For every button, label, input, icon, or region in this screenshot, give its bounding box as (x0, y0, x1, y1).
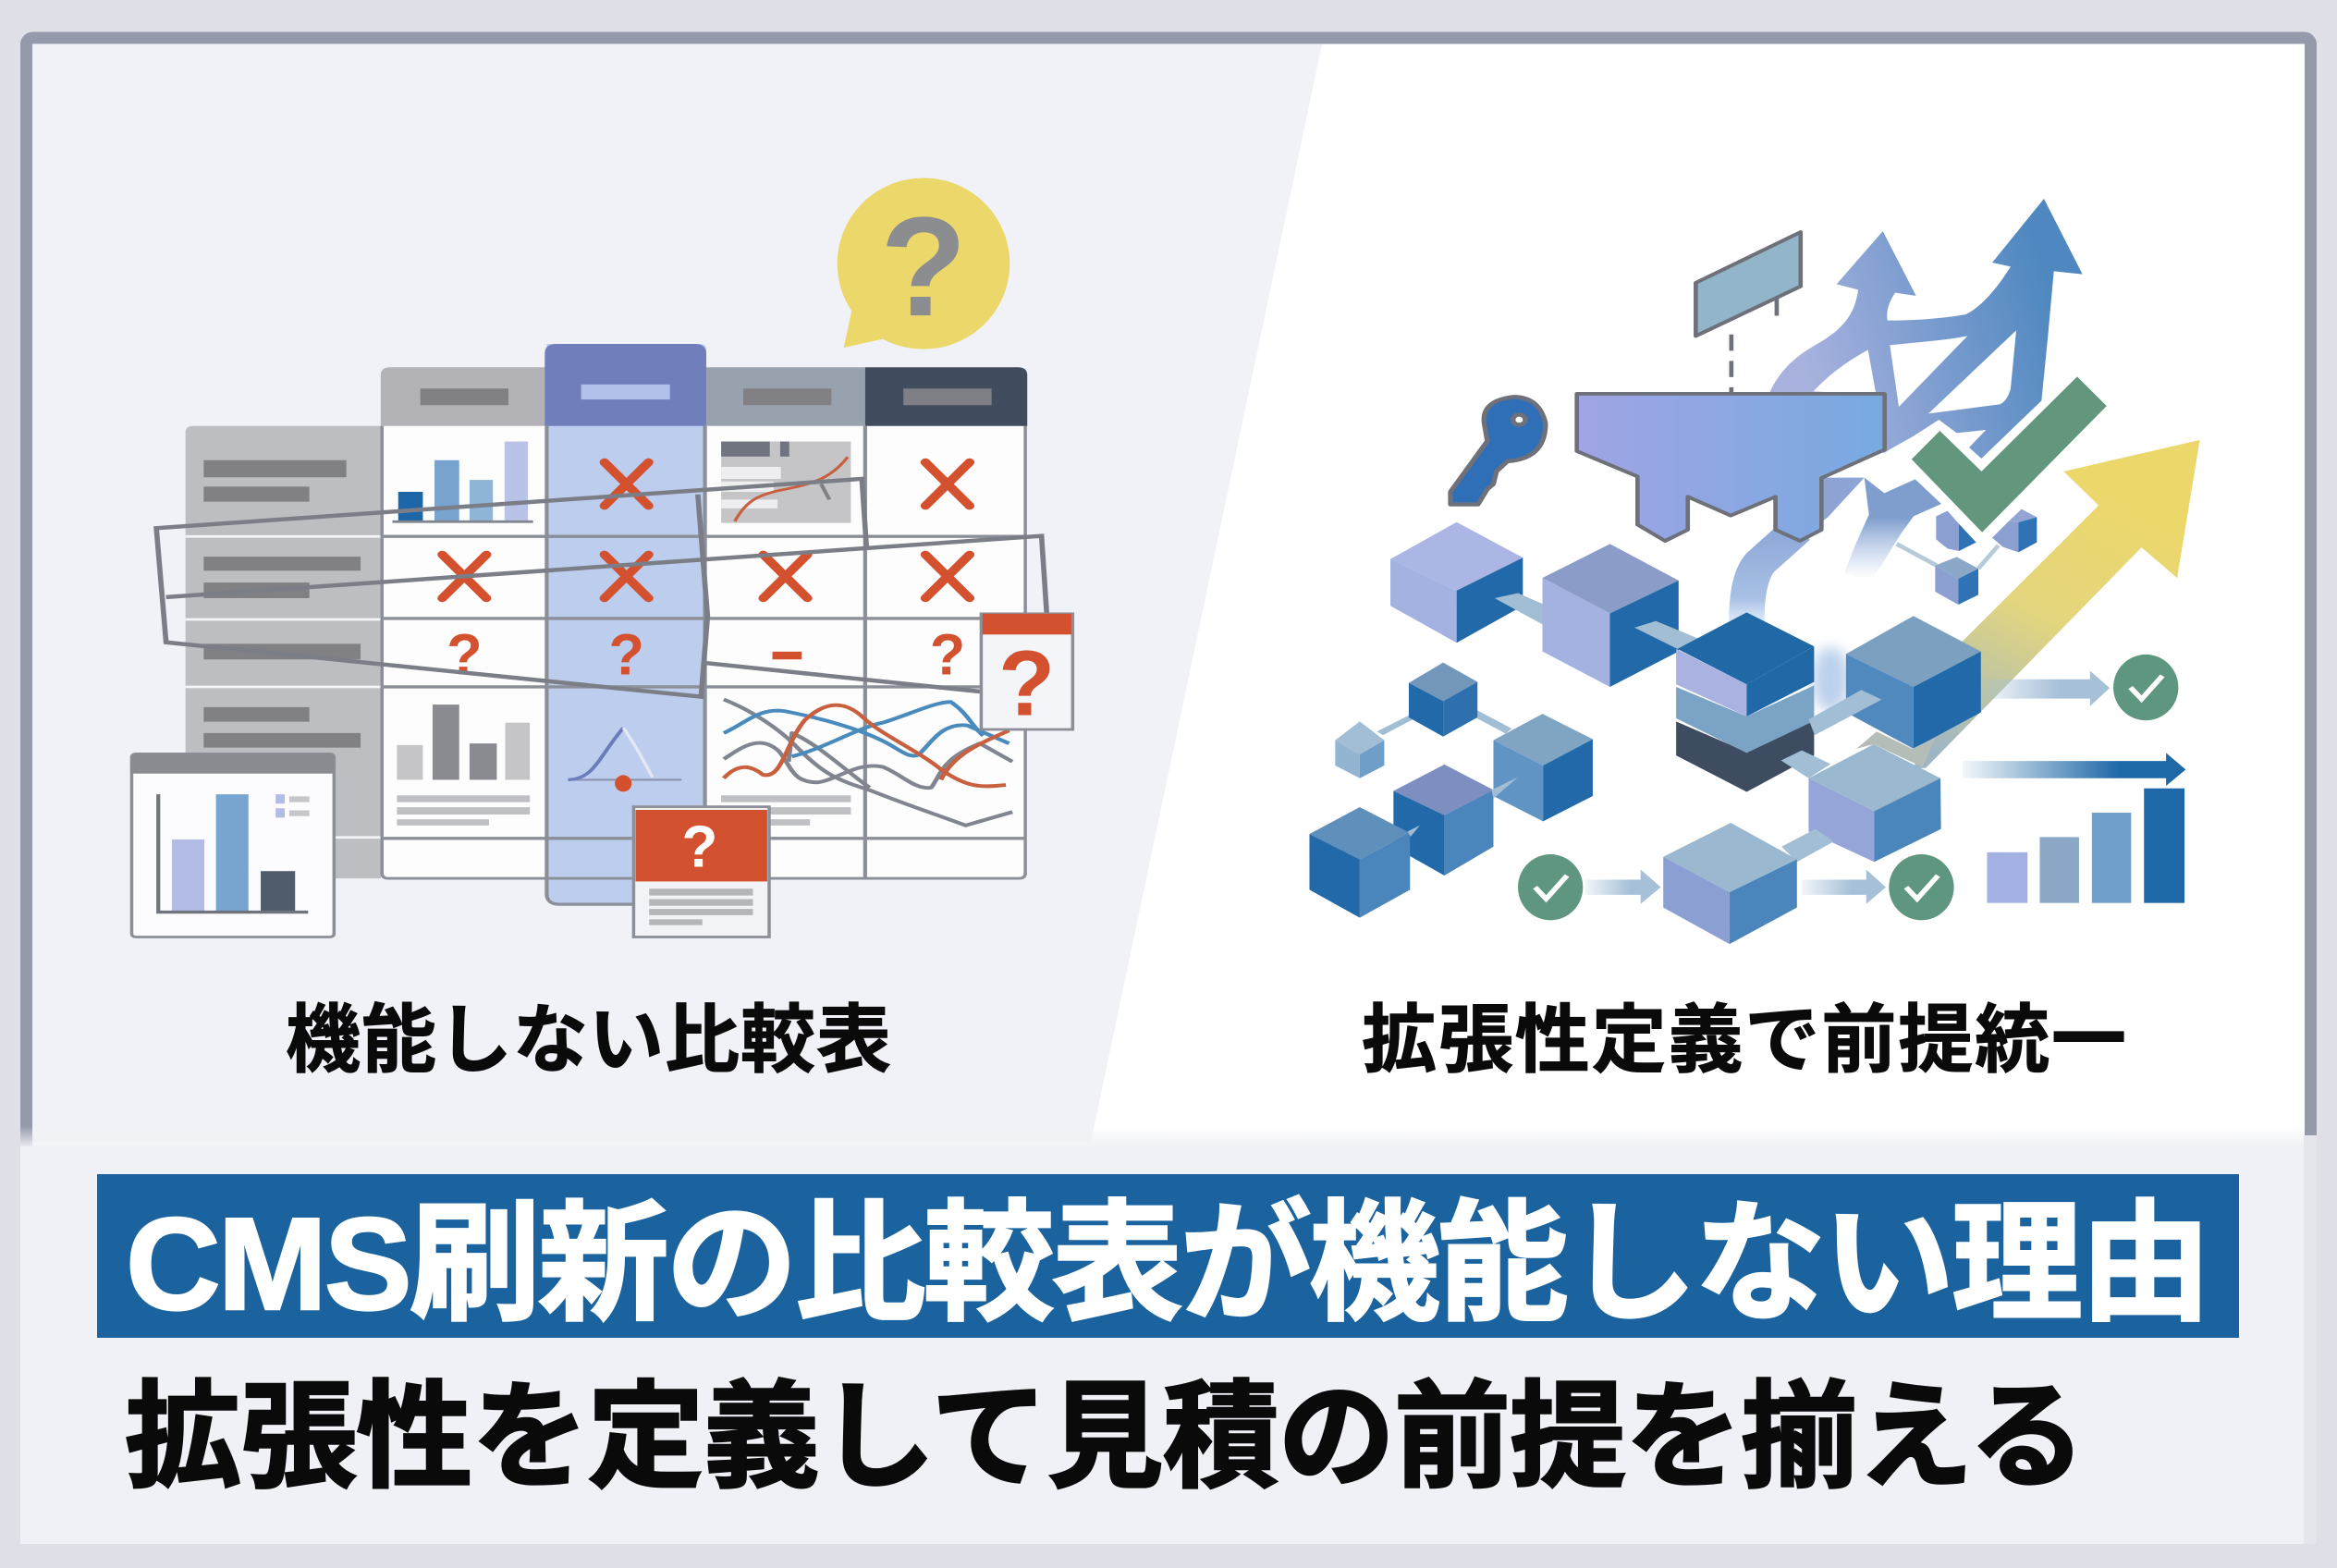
link: pale cube to second cube (1495, 594, 1544, 625)
arrow: cube to top badge (1984, 670, 2110, 706)
caption: left: 機能しない比較表 (286, 999, 891, 1083)
bar chart: row 1 (392, 442, 533, 523)
subtitle: 拡張性を定義して見積の前提を揃える (125, 1372, 2086, 1502)
marks: red question marks (447, 623, 965, 688)
overlapping misaligned outlines (156, 479, 1046, 697)
arrow tail shade behind lower cube (1856, 731, 1935, 767)
icon: report question card (633, 807, 769, 937)
link: lower right cube to bottom cube (1781, 829, 1834, 862)
funnel (1577, 394, 1885, 541)
icon: calendar question card: ? (998, 631, 1055, 735)
icon: key (1450, 397, 1546, 505)
stacked central blocks (1676, 612, 1814, 792)
arrow: cube to badge (1802, 869, 1886, 904)
caption: right: 拡張性定義で前提統一 (1362, 999, 2126, 1083)
icon: check badge left (1518, 854, 1583, 920)
chart window: bottom left (131, 753, 334, 937)
pale stem below funnel (1746, 530, 1797, 621)
arrow: blue right (1963, 753, 2185, 786)
cube: second (1543, 544, 1679, 687)
illustration: scalable architecture (1309, 199, 2200, 944)
icon: check badge right (2113, 655, 2178, 720)
bar chart: row 4 (397, 704, 530, 826)
marks: red question marks: ? (447, 623, 483, 688)
sign with dashed line (1695, 232, 1801, 394)
arrow: badge to cube (1585, 869, 1661, 904)
icon: green check mark (1912, 376, 2107, 533)
bell curve chart (569, 728, 681, 791)
thumbnail: line chart card (721, 442, 850, 523)
icon: report question card: ? (681, 814, 718, 880)
cube: lower right (1781, 744, 1941, 862)
panel: left background (32, 44, 1322, 1142)
icon: yellow question bubble (838, 178, 1009, 349)
marks: red question marks: ? (930, 623, 965, 688)
bar chart: growth (1987, 789, 2184, 903)
link: stack to right cube (1808, 690, 1881, 735)
cube: right of stack (1846, 616, 1981, 749)
icon: yellow question bubble: ? (880, 188, 967, 346)
network of rising arrows (1768, 199, 2083, 582)
yellow growth arrow (1914, 440, 2200, 768)
marks: red question marks: ? (608, 623, 644, 688)
small cubes with links (1897, 509, 2037, 605)
row label column (186, 426, 381, 878)
icon: calendar question card (981, 614, 1072, 735)
table body (382, 344, 1025, 904)
title banner: CMS刷新の比較表が機能しない理由 (126, 1191, 2211, 1338)
soft glow behind stack (1812, 646, 1849, 712)
marks: red crosses (442, 462, 970, 598)
cube: pale (1390, 522, 1523, 643)
cube: bottom centre (1663, 823, 1797, 944)
panel: frame (26, 38, 2311, 1240)
table headers (381, 344, 1027, 426)
link: second cube to stack (1634, 621, 1699, 649)
tangled line chart (721, 699, 1012, 826)
icon: check badge middle (1889, 854, 1954, 920)
illustration: broken comparison table (131, 178, 1072, 937)
left cube cluster (1309, 663, 1593, 918)
panel: bottom title band (20, 1126, 2317, 1544)
